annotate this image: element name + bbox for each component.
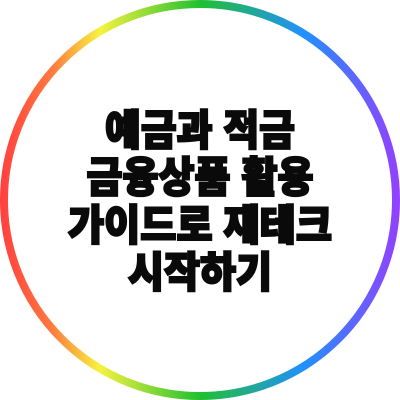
title: 시작하기 [128,249,272,296]
title: 가이드로 재테크 [68,202,332,249]
title [68,107,332,296]
title: 금융상품 활용 [86,154,314,201]
title: 예금과 적금 [105,107,295,154]
